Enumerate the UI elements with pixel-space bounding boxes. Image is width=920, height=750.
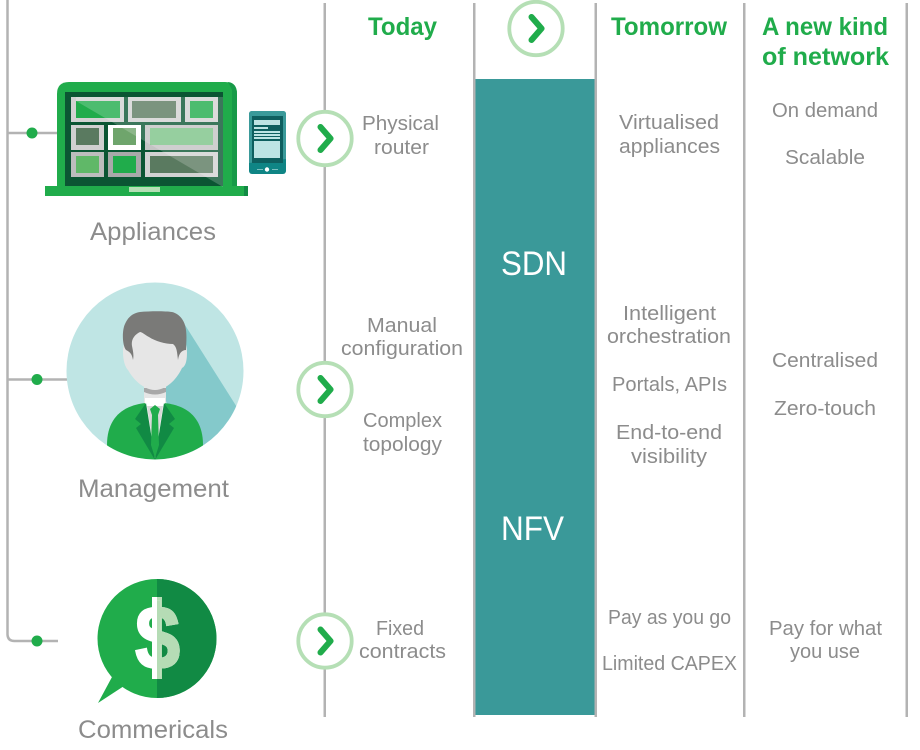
icon: laptop: [45, 82, 248, 196]
heading: A new kind of network: A new kind: [762, 13, 888, 41]
label: Appliances: Appliances: [90, 218, 216, 246]
text: fixed contracts: contracts: [359, 640, 446, 663]
arrow: management row: [298, 363, 352, 416]
text: fixed contracts: [359, 617, 446, 663]
text: end-to-end visibility: [616, 421, 722, 468]
icon: phone: [249, 111, 286, 174]
text: pay for what you use: you use: [790, 640, 860, 663]
icon: manager portrait: [66, 282, 245, 470]
text: manual configuration: Manual: [367, 314, 437, 337]
text: complex topology: [363, 409, 443, 456]
text: manual configuration: configuration: [341, 337, 463, 360]
text: intelligent orchestration: Intelligent: [623, 302, 716, 325]
arrow: commercials row: [298, 614, 352, 668]
heading: A new kind of network: of network: [762, 43, 889, 71]
icon: dollar speech bubble: $: [135, 589, 180, 689]
text: on demand: On demand: [772, 99, 878, 122]
text: centralised: Centralised: [772, 349, 878, 372]
text: portals, APIs: Portals, APIs: [612, 373, 727, 396]
text: fixed contracts: Fixed: [376, 617, 424, 640]
icon: dollar speech bubble: [98, 579, 217, 703]
column divider lines: [324, 3, 908, 717]
heading: A new kind of network: [762, 13, 889, 71]
arrow: appliances row: [298, 112, 352, 165]
panel: SDN / NFV band: NFV: [501, 510, 564, 548]
text: complex topology: Complex: [363, 409, 443, 432]
text: end-to-end visibility: End-to-end: [616, 421, 722, 444]
text: virtualised appliances: appliances: [619, 135, 720, 158]
text: physical router: Physical: [362, 112, 439, 135]
text: end-to-end visibility: visibility: [631, 445, 708, 468]
text: manual configuration: [341, 314, 463, 360]
panel: SDN / NFV band: SDN: [501, 245, 567, 283]
heading: Tomorrow: Tomorrow: [611, 13, 728, 41]
arrow: header: [509, 2, 563, 55]
text: virtualised appliances: Virtualised: [619, 111, 719, 134]
text: complex topology: topology: [363, 433, 443, 456]
text: scalable: Scalable: [785, 146, 865, 169]
text: pay for what you use: Pay for what: [769, 617, 882, 640]
text: intelligent orchestration: [607, 302, 731, 348]
text: pay as you go: Pay as you go: [608, 606, 731, 629]
icon: dollar speech bubble: $: [135, 589, 180, 689]
heading: Today: Today: [368, 13, 437, 41]
text: limited CAPEX: Limited CAPEX: [602, 652, 737, 675]
panel: SDN / NFV band: [476, 79, 594, 715]
text: virtualised appliances: [619, 111, 720, 158]
text: physical router: router: [374, 136, 429, 159]
left connector tree: [8, 0, 67, 646]
text: physical router: [362, 112, 439, 159]
label: Management: Management: [78, 475, 229, 503]
label: Commericals: Commericals: [78, 716, 228, 744]
text: intelligent orchestration: orchestration: [607, 325, 731, 348]
text: zero-touch: Zero-touch: [774, 397, 876, 420]
text: pay for what you use: [769, 617, 882, 663]
